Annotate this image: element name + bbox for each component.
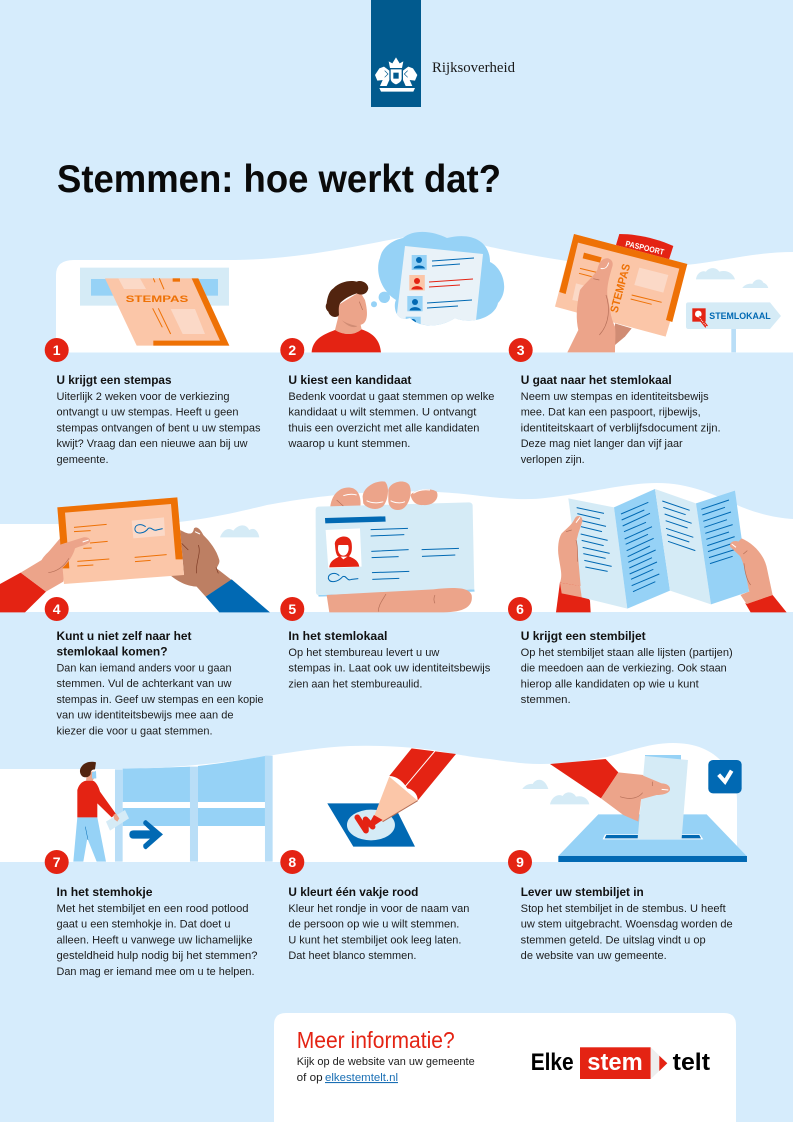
text block: step 8: U kleurt één vakje rood bbox=[288, 885, 418, 899]
text block: step 7: Met het stembiljet en een rood potlood bbox=[56, 903, 248, 915]
number badge 9 bbox=[508, 850, 532, 874]
text block: step 4: Dan kan iemand anders voor u gaan bbox=[56, 662, 232, 674]
text block: step 5: In het stemlokaal bbox=[288, 629, 387, 643]
panel: step 1 bbox=[45, 268, 261, 466]
illustration: stempas in letterbox bbox=[80, 268, 229, 346]
icon: thought cloud with candidate list bbox=[371, 232, 504, 331]
logo wordmark: Rijksoverheid bbox=[432, 60, 515, 76]
panel: step 8 bbox=[280, 748, 469, 962]
arrow bbox=[129, 820, 163, 849]
panel: step 4 bbox=[0, 497, 270, 737]
number badge 8 bbox=[280, 850, 304, 874]
number badge 1: 1 bbox=[53, 342, 61, 358]
text block: step 9: Lever uw stembiljet in bbox=[521, 885, 644, 899]
logo: elke stem telt: Elke bbox=[531, 1049, 574, 1076]
number badge 8: 8 bbox=[288, 854, 296, 870]
text block: step 7: alleen. Heeft u vanwege uw lichamelijke bbox=[56, 934, 252, 946]
number badge 7: 7 bbox=[53, 854, 61, 870]
text block: step 9 bbox=[521, 885, 733, 962]
number badge 2: 2 bbox=[288, 342, 296, 358]
text block: step 6: Op het stembiljet staan alle lijsten (partijen) bbox=[521, 647, 733, 659]
illustration: hand dropping ballot in box bbox=[522, 755, 747, 862]
number badge 5 bbox=[280, 597, 304, 621]
panel: white wave band row 2 bbox=[0, 483, 793, 612]
text block: step 5: zien aan het stembureaulid. bbox=[288, 678, 422, 690]
text block: step 9: uw stem uitgebracht. Woensdag worden de bbox=[521, 919, 733, 931]
panel: step 5 bbox=[280, 481, 491, 690]
illustration: hand holding stempas and passport bbox=[555, 234, 768, 352]
text block: step 6: stemmen. bbox=[521, 694, 571, 706]
panel: step 3 bbox=[509, 234, 781, 466]
illustration: red pencil colouring box bbox=[327, 748, 456, 847]
number badge 3: 3 bbox=[517, 342, 525, 358]
illustration: hand holding stempas and passport: STEMPAS bbox=[609, 262, 633, 314]
number badge 4 bbox=[45, 597, 69, 621]
text block: step 4 bbox=[56, 629, 264, 737]
text block: step 4: stemlokaal komen? bbox=[56, 644, 168, 658]
text block: step 2: U kiest een kandidaat bbox=[288, 373, 411, 387]
panel: step 2 bbox=[280, 232, 504, 450]
text block: step 8: U kunt het stembiljet ook leeg laten. bbox=[288, 934, 461, 946]
logo: elke stem telt: telt bbox=[673, 1049, 710, 1076]
text block: step 7: In het stemhokje bbox=[56, 885, 153, 899]
illustration: stempas in letterbox: STEMPAS bbox=[126, 294, 188, 304]
text block: website reference: Kijk op de website van uw gemeente bbox=[297, 1056, 475, 1068]
text block: step 5 bbox=[288, 629, 491, 690]
text block: step 1: ontvangt u uw stempas. Heeft u geen bbox=[56, 407, 238, 419]
panel: step 7 bbox=[45, 756, 273, 978]
panel: step 6 bbox=[508, 489, 787, 706]
illustration: hands holding folded ballot bbox=[556, 489, 787, 612]
text block: step 2: waarop u kunt stemmen. bbox=[287, 438, 410, 450]
text block: step 4: stemmen. Vul de achterkant van uw bbox=[56, 678, 232, 690]
icon: signpost stemlokaal bbox=[686, 302, 781, 352]
text block: step 1: Uiterlijk 2 weken voor de verkiezing bbox=[56, 391, 230, 403]
text block: step 2 bbox=[287, 373, 494, 450]
text block: step 7 bbox=[56, 885, 258, 978]
illustration: two hands passing stempas bbox=[0, 497, 270, 612]
text block: step 4: stempas in. Geef uw stempas en een kopie bbox=[56, 694, 264, 706]
text block: step 9: stemmen geteld. De uitslag vindt u op bbox=[521, 934, 706, 946]
text block: step 2: thuis een overzicht met alle kandidaten bbox=[288, 422, 479, 434]
text block: step 9: de website van uw gemeente. bbox=[521, 950, 667, 962]
text block: step 1: U krijgt een stempas bbox=[56, 373, 172, 387]
illustration: voting booth with person bbox=[73, 756, 273, 862]
text block: step 8: Dat heet blanco stemmen. bbox=[288, 950, 416, 962]
illustration: hand holding ID card bbox=[316, 481, 475, 612]
text block: step 9: Stop het stembiljet in de stembus. U heeft bbox=[521, 903, 726, 915]
text block: step 1: kwijt? Vraag dan een nieuwe aan bij uw bbox=[56, 438, 248, 450]
text block: step 6: die meedoen aan de verkiezing. Ook staan bbox=[521, 663, 727, 675]
text block: step 8 bbox=[288, 885, 469, 962]
number badge 2 bbox=[280, 338, 304, 362]
text block: step 1: stempas ontvangen of bent u uw stempas bbox=[56, 422, 261, 434]
logo: elke stem telt: stem bbox=[587, 1049, 643, 1076]
text block: step 3: Neem uw stempas en identiteitsbewijs bbox=[521, 391, 709, 403]
text block: step 8: Kleur het rondje in voor de naam van bbox=[288, 903, 469, 915]
text block: step 5: Op het stembureau levert u uw bbox=[288, 647, 439, 659]
number badge 6 bbox=[508, 597, 532, 621]
text block: step 6 bbox=[521, 629, 733, 706]
text block: step 6: hierop alle kandidaten op wie u kunt bbox=[521, 678, 699, 690]
number badge 9: 9 bbox=[516, 854, 524, 870]
panel: step 9 bbox=[508, 755, 747, 962]
text block: website reference: of op bbox=[297, 1072, 323, 1084]
illustration: person thinking bbox=[312, 281, 381, 352]
text block: step 6: U krijgt een stembiljet bbox=[521, 629, 646, 643]
clouds bbox=[696, 268, 768, 288]
number badge 3 bbox=[509, 338, 533, 362]
text block: step 3 bbox=[521, 373, 721, 466]
text block: step 1: gemeente. bbox=[56, 454, 108, 466]
text block: step 3: mee. Dat kan een paspoort, rijbewijs, bbox=[521, 407, 701, 419]
text block: step 4: Kunt u niet zelf naar het bbox=[56, 629, 192, 643]
text block: step 7: Dan mag er iemand mee om u te helpen. bbox=[56, 966, 254, 978]
text block: step 7: gesteldheid hulp nodig bij het stemmen? bbox=[56, 950, 258, 962]
text block: step 5: stempas in. Laat ook uw identiteitsbewijs bbox=[288, 663, 491, 675]
text block: step 3: verlopen zijn. bbox=[521, 454, 585, 466]
text block: step 2: Bedenk voordat u gaat stemmen op welke bbox=[288, 391, 494, 403]
number badge 1 bbox=[45, 338, 69, 362]
person walking bbox=[73, 762, 129, 862]
text block: step 3: Deze mag niet langer dan vijf jaar bbox=[521, 438, 683, 450]
text block: website reference: elkestemtelt.nl bbox=[325, 1072, 398, 1084]
passport bbox=[615, 234, 673, 262]
title: Stemmen: hoe werkt dat? bbox=[57, 158, 501, 201]
header logo: Rijksoverheid bbox=[371, 0, 515, 107]
icon: checkmark box bbox=[708, 760, 742, 793]
number badge 7 bbox=[45, 850, 69, 874]
text block: step 8: de persoon op wie u wilt stemmen. bbox=[288, 919, 459, 931]
panel: white wave band row 1 bbox=[56, 236, 793, 352]
number badge 5: 5 bbox=[288, 601, 296, 617]
number badge 4: 4 bbox=[53, 601, 61, 617]
text block: website reference bbox=[297, 1056, 475, 1084]
text block: step 4: kiezer die voor u gaat stemmen. bbox=[56, 725, 212, 737]
panel: meer informatie bbox=[274, 1013, 736, 1122]
text block: step 4: van uw identiteitsbewijs mee aan de bbox=[56, 710, 234, 722]
number badge 6: 6 bbox=[516, 601, 524, 617]
text block: step 7: gaat u een stemhokje in. Dat doet u bbox=[56, 919, 230, 931]
logo: elke stem telt bbox=[531, 1047, 710, 1079]
panel: white wave band row 3 bbox=[0, 743, 737, 862]
text block: step 1 bbox=[56, 373, 261, 466]
text block: step 3: identiteitskaart of verblijfsdocument zijn. bbox=[521, 422, 721, 434]
text block: step 3: U gaat naar het stemlokaal bbox=[521, 373, 672, 387]
icon: coat of arms bbox=[375, 57, 417, 92]
passport: PASPOORT bbox=[625, 239, 665, 257]
icon: signpost stemlokaal: STEMLOKAAL bbox=[709, 311, 771, 321]
text block: step 2: kandidaat u wilt stemmen. U ontvangt bbox=[288, 407, 476, 419]
heading: meer informatie: Meer informatie? bbox=[297, 1027, 455, 1053]
